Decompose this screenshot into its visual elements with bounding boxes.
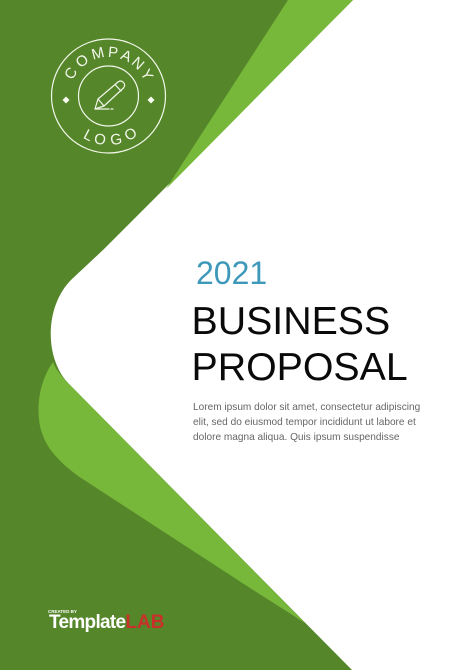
logo dots (62, 96, 154, 104)
year: 2021 (196, 255, 267, 291)
logo curved text: COMPANY: N (128, 54, 147, 74)
logo curved text: LOGO: O (121, 124, 140, 145)
logo outer ring (52, 39, 166, 153)
logo curved text: LOGO: O (93, 130, 107, 149)
logo curved text: COMPANY: Y (137, 66, 156, 83)
logo curved text: LOGO (81, 124, 140, 149)
body line 2: elit, sed do eiusmod tempor incididunt ut labore et (193, 417, 416, 428)
brand caption: CREATED BY (48, 609, 77, 614)
logo curved text: COMPANY: A (118, 46, 134, 66)
logo curved text: COMPANY: M (90, 44, 106, 64)
body text (193, 402, 420, 443)
logo: company badge (52, 39, 166, 153)
brand name: TemplateLAB (49, 612, 164, 633)
body line 1: Lorem ipsum dolor sit amet, consectetur adipiscing (193, 402, 420, 413)
body line 3: dolore magna aliqua. Quis ipsum suspendisse (193, 432, 400, 443)
logo curved text: LOGO: L (81, 126, 96, 145)
title line: PROPOSAL: PROPOSAL (192, 345, 408, 389)
logo curved text: COMPANY (61, 44, 156, 83)
logo curved text: COMPANY: C (61, 64, 81, 83)
brand: TemplateLAB logo (48, 609, 164, 633)
title (192, 299, 408, 389)
shape: light green top wedge (166, 0, 353, 189)
icon: pencil (95, 81, 125, 109)
logo curved text: COMPANY: P (107, 44, 119, 62)
logo curved text: LOGO: G (109, 130, 123, 149)
logo inner ring (78, 66, 138, 126)
panel: dark green background shape (0, 0, 353, 670)
shape: light green lower swoosh (39, 362, 305, 623)
title line: BUSINESS: BUSINESS (192, 299, 390, 343)
logo curved text: COMPANY: O (73, 51, 92, 72)
